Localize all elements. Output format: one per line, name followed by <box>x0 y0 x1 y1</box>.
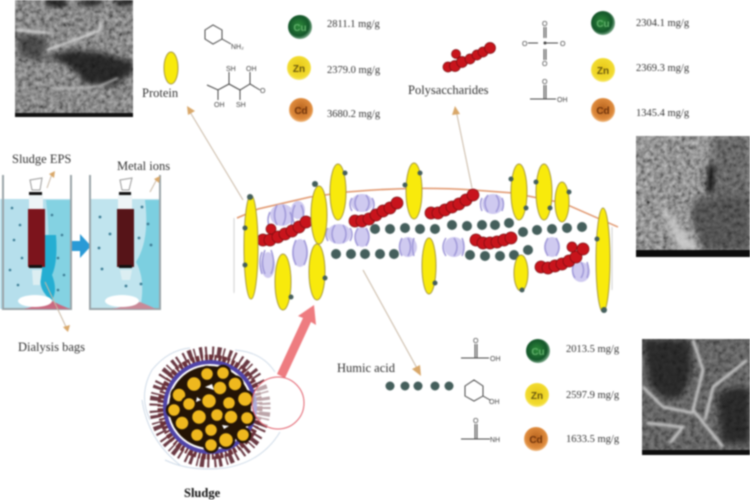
label: Sludge: Sludge <box>184 486 221 500</box>
sludge floc <box>142 348 304 469</box>
chemical structures: protein functional groups: OH <box>214 102 224 109</box>
polysaccharide chains in membrane <box>257 189 589 274</box>
metal ball: Cu (humic acid): Cu <box>531 347 545 358</box>
metal ball: Zn (protein): Zn <box>293 64 305 75</box>
right beaker with dialysis bag <box>90 175 160 309</box>
value: polysaccharides Zn: 2369.3 mg/g <box>636 63 690 74</box>
icon: protein ellipse <box>164 52 178 84</box>
chemical structures: polysaccharide functional groups: O <box>522 41 528 48</box>
chemical structures: polysaccharide functional groups: OH <box>557 97 568 104</box>
metal ball: Cu (protein) <box>288 15 312 39</box>
metal ball: Zn (protein) <box>287 56 311 80</box>
icon: polysaccharide chain <box>443 42 496 72</box>
chemical structures: humic acid functional groups: O <box>473 338 479 345</box>
chemical structures: protein functional groups: SH <box>226 66 236 73</box>
metal ball: Cd (humic acid) <box>524 427 548 451</box>
humic acid beads in membrane <box>331 218 587 261</box>
chemical structures: polysaccharide functional groups: O <box>542 21 548 28</box>
chemical structures: protein functional groups: SH <box>236 102 246 109</box>
metal ball: Cd (polysaccharides): Cd <box>596 106 610 117</box>
metal ball: Cd (humic acid): Cd <box>529 435 543 446</box>
metal ball: Cu (protein): Cu <box>293 23 307 34</box>
lipid clusters <box>260 194 590 282</box>
chemical structures: polysaccharide functional groups <box>522 21 568 104</box>
metal ball: Cu (polysaccharides) <box>591 11 615 35</box>
value: protein Cu: 2811.1 mg/g <box>327 19 380 30</box>
label: Sludge EPS: Sludge EPS <box>12 152 71 166</box>
metal ball: Zn (humic acid): Zn <box>531 391 543 402</box>
arrows: callouts from membrane to components <box>187 106 472 376</box>
metal ball: Cd (polysaccharides) <box>591 98 615 122</box>
label: Dialysis bags: Dialysis bags <box>18 340 85 354</box>
metal ball: Cd (protein) <box>289 98 313 122</box>
value: humic acid Cd: 1633.5 mg/g <box>566 434 620 445</box>
arrow: pink arrow from sludge floc to membrane <box>277 305 316 378</box>
chemical structures: humic acid functional groups: O <box>473 418 479 425</box>
metal ball: Cu (humic acid) <box>526 339 550 363</box>
metal ball: Zn (polysaccharides): Zn <box>597 66 609 77</box>
value: humic acid Cu: 2013.5 mg/g <box>566 344 620 355</box>
value: protein Cd: 3680.2 mg/g <box>327 109 381 120</box>
chemical structures: polysaccharide functional groups: O <box>560 41 566 48</box>
metal ball: Zn (polysaccharides) <box>591 58 615 82</box>
chemical structures: protein functional groups: OH <box>246 66 256 73</box>
chemical structures: humic acid functional groups: OH <box>489 399 500 406</box>
protein ellipses in membrane <box>244 163 610 312</box>
SEM image: humic acid-bound sludge surface <box>642 339 750 455</box>
metal ions on proteins <box>242 170 607 313</box>
value: polysaccharides Cu: 2304.1 mg/g <box>636 18 690 29</box>
metal ball: Zn (humic acid) <box>525 383 549 407</box>
membrane: cell surface model <box>234 163 618 313</box>
chemical structures: humic acid functional groups: OH <box>490 356 500 363</box>
chemical structures: protein functional groups: O <box>260 88 266 95</box>
SEM image: polysaccharide-bound sludge surface <box>636 136 750 257</box>
chemical structures: humic acid functional groups <box>461 338 500 444</box>
arrow: blue process arrow between beakers <box>72 234 91 258</box>
label: Humic acid: Humic acid <box>337 361 396 375</box>
left beaker with dialysis bag <box>0 175 71 309</box>
chemical structures: protein functional groups: NH₂ <box>231 44 244 51</box>
value: protein Zn: 2379.0 mg/g <box>327 65 381 76</box>
chemical structures: protein functional groups <box>205 25 266 109</box>
SEM image: protein-bound sludge surface <box>15 0 133 117</box>
label: Polysaccharides: Polysaccharides <box>408 83 489 97</box>
chemical structures: humic acid functional groups: NH <box>490 437 500 444</box>
value: polysaccharides Cd: 1345.4 mg/g <box>636 108 690 119</box>
highlight circle on floc edge <box>252 377 304 429</box>
chemical structures: polysaccharide functional groups: O <box>542 79 548 86</box>
value: humic acid Zn: 2597.9 mg/g <box>566 390 620 401</box>
icon: humic acid bead chain <box>386 382 454 390</box>
metal ball: Cd (protein): Cd <box>294 106 308 117</box>
chemical structures: polysaccharide functional groups: O <box>542 61 548 68</box>
metal ball: Cu (polysaccharides): Cu <box>596 19 610 30</box>
label: Protein: Protein <box>142 86 179 100</box>
arrows: callouts for beaker labels <box>45 171 160 332</box>
label: Metal ions: Metal ions <box>117 159 170 173</box>
